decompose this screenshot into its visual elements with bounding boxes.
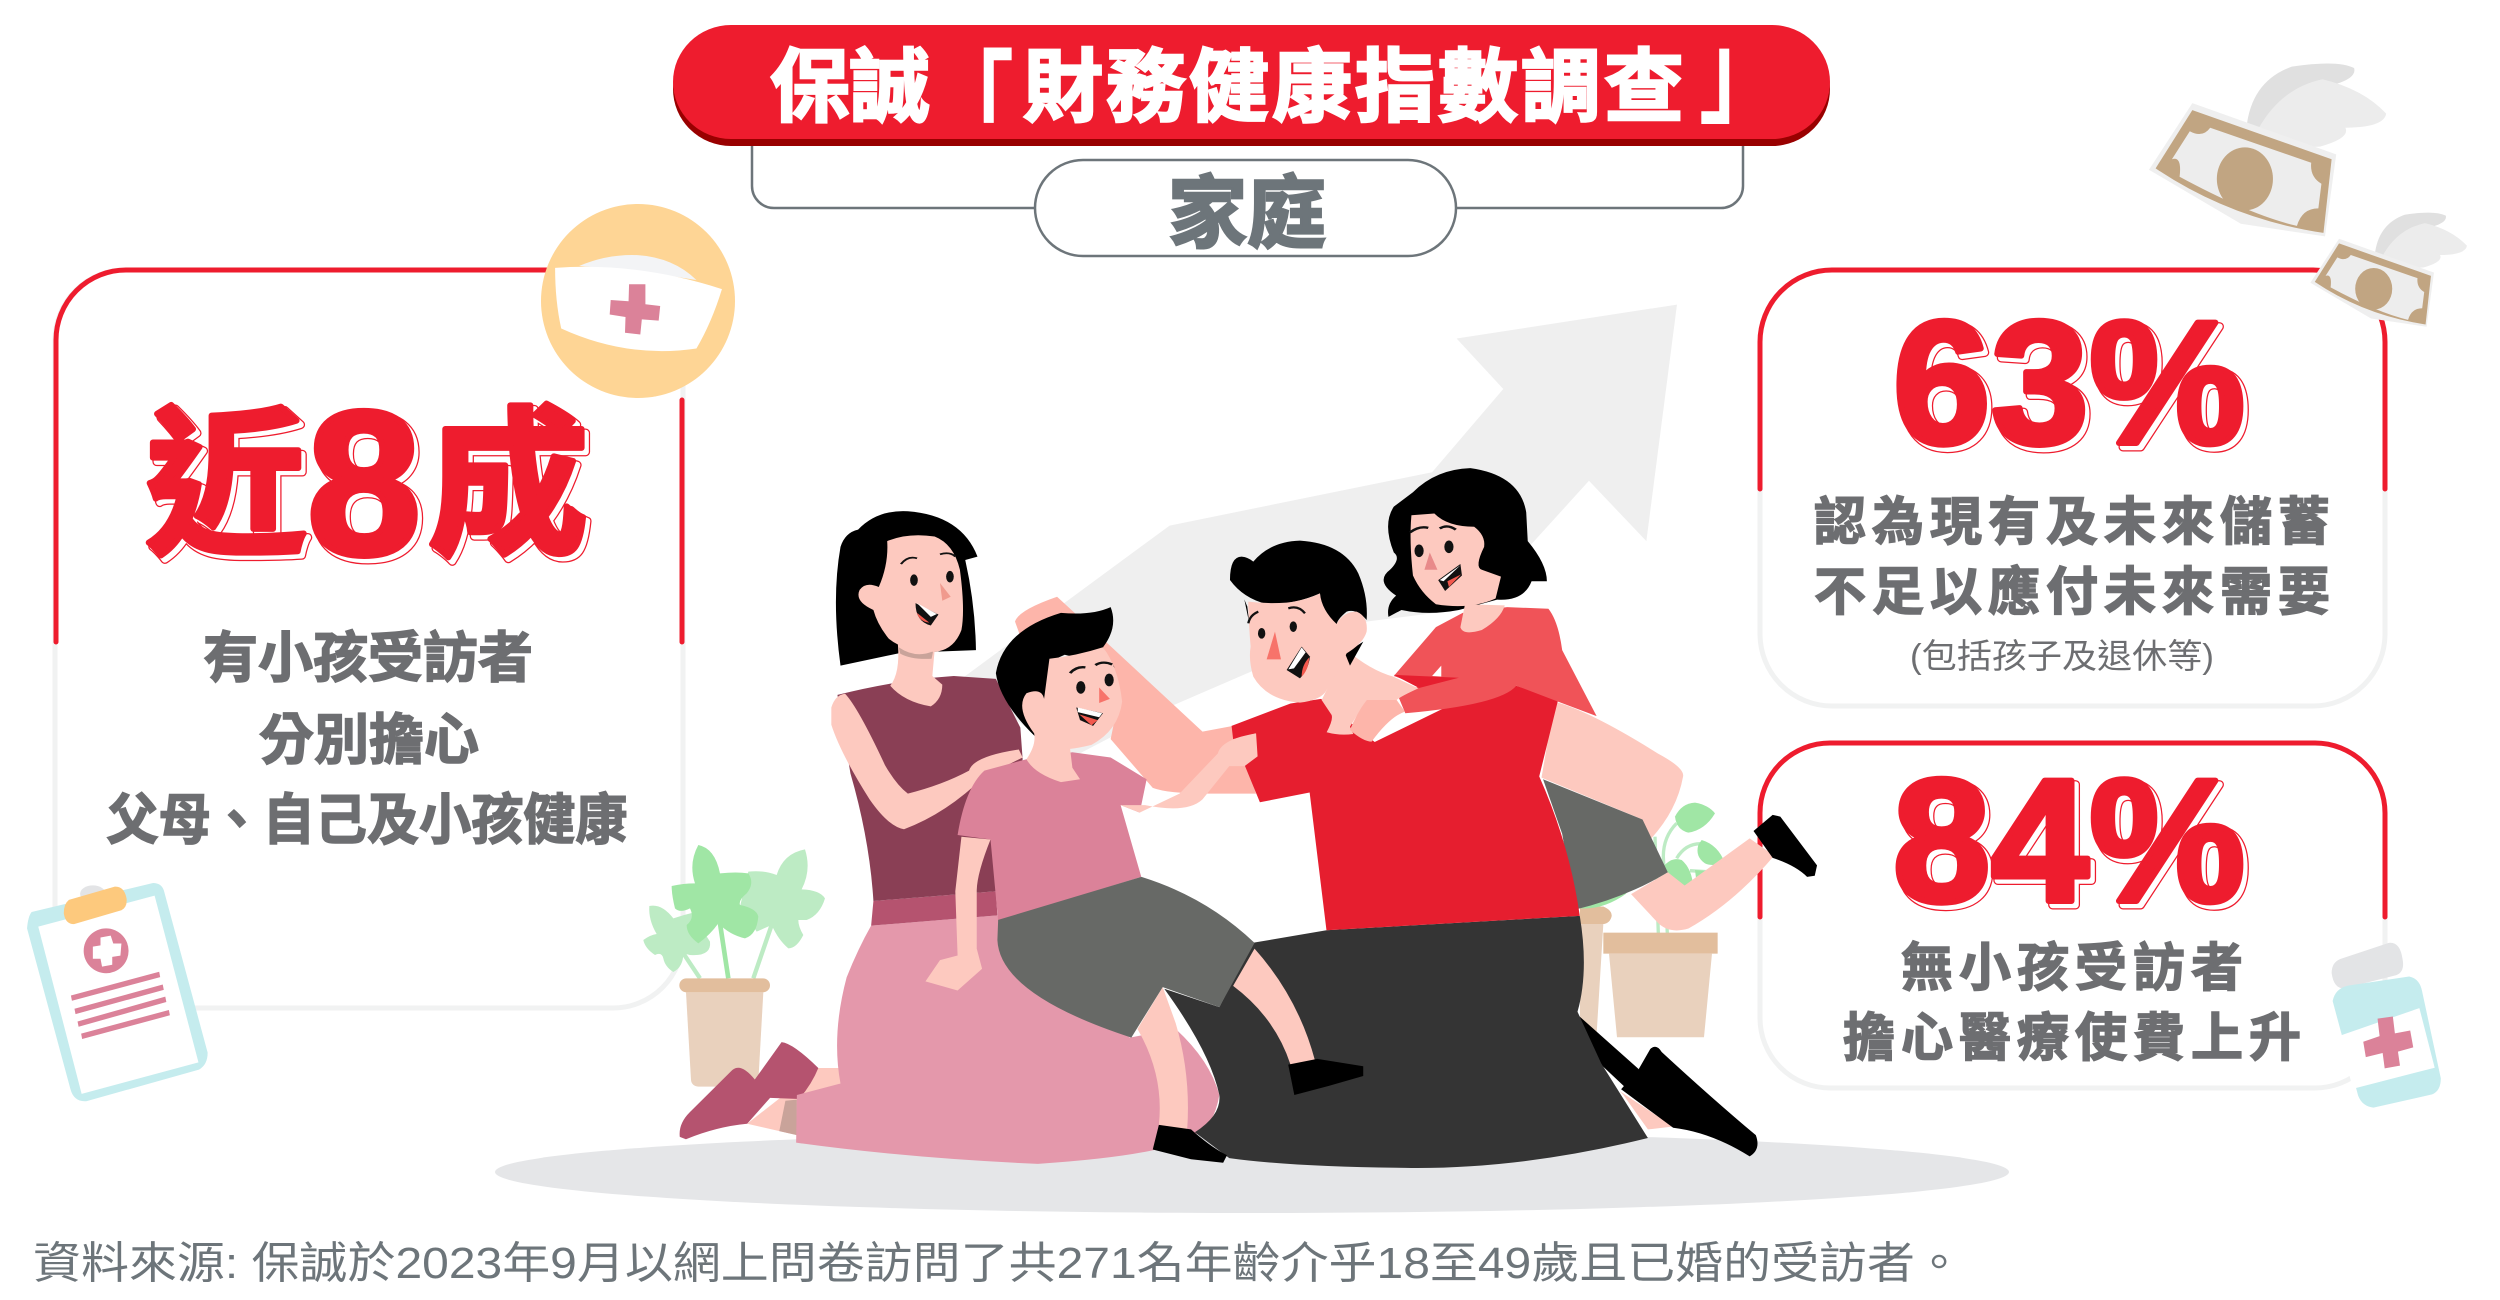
figure: mother lower body xyxy=(680,676,1219,1164)
right bottom stat 84%: 84% xyxy=(1897,748,2249,943)
left big stat: 成 xyxy=(432,400,592,579)
left big stat: 近 xyxy=(146,396,306,575)
figure: boy xyxy=(925,607,1363,1163)
panel: left card xyxy=(55,270,683,1008)
icon: flying money xyxy=(2149,63,2467,327)
illustration: family xyxy=(680,468,1817,1168)
right bottom description: 無小孩受訪者 xyxy=(1901,940,2249,998)
title banner: 「 xyxy=(930,41,1014,173)
figure: girl upper body xyxy=(1384,468,1597,716)
header connector bracket xyxy=(752,140,1743,208)
left big stat: 近 xyxy=(150,400,310,579)
left big stat: 近 xyxy=(150,400,310,579)
right top stat 63%: 63% xyxy=(1897,290,2249,485)
left big stat: 成 xyxy=(432,400,592,579)
large bill xyxy=(2149,63,2386,236)
left big stat: 8 xyxy=(311,373,425,602)
ground shadow xyxy=(495,1131,2009,1213)
right bottom stat 84%: 84% xyxy=(1893,744,2245,939)
plant: left xyxy=(643,845,825,1087)
subtitle pill xyxy=(1035,160,1456,258)
icon: medical clipboard xyxy=(27,883,208,1101)
right top note: (包括孩子及退休等) xyxy=(1910,638,2214,676)
small bill xyxy=(2310,213,2467,327)
plant: right pots xyxy=(1580,803,1725,1037)
panel: right top card xyxy=(1760,270,2385,706)
figure: father head xyxy=(1230,541,1418,742)
figure: father feet xyxy=(1560,1015,1758,1156)
figure: mother head and arm xyxy=(831,511,1023,829)
subtitle pill: 家庭 xyxy=(1168,169,1326,258)
left big stat: 成 xyxy=(428,396,588,575)
right top description: 認為現有及未來儲蓄 xyxy=(1814,494,2336,552)
panel: right bottom card xyxy=(1760,743,2385,1088)
right bottom description: 擔心醫療使費上升 xyxy=(1843,1010,2307,1068)
icon: medicine bottle xyxy=(2332,943,2441,1108)
title banner: 財務健康指數調查 xyxy=(1023,43,1687,132)
figure: girl legs xyxy=(1542,702,1817,930)
left description text: 有小孩受訪者 xyxy=(203,627,533,689)
right bottom stat 84%: 84% xyxy=(1897,748,2249,943)
figure: father body xyxy=(1164,686,1648,1168)
left description text: 父母、自己及小孩健康 xyxy=(106,789,628,851)
title banner: 保誠 xyxy=(770,43,930,132)
right bottom description xyxy=(1843,940,2307,1068)
right top description xyxy=(1814,494,2336,622)
source footnote: 資料來源: 保誠於2023年9月以網上問卷訪問了共271名年齡介乎18至49歲且已婚的受訪者。 xyxy=(33,1239,1963,1288)
left big stat: 8 xyxy=(311,373,425,602)
left big stat xyxy=(146,369,592,602)
figure: father back arm xyxy=(1015,597,1256,794)
title banner xyxy=(673,6,1830,173)
right top description: 不足以應付未來需要 xyxy=(1814,564,2336,622)
left big stat: 8 xyxy=(307,369,421,598)
background rising arrow xyxy=(961,305,1677,759)
right top stat 63%: 63% xyxy=(1897,290,2249,485)
title banner: 」 xyxy=(1699,6,1783,138)
icon: nurse cap xyxy=(541,204,735,398)
right top stat 63%: 63% xyxy=(1893,286,2245,481)
left description text: 分別擔心 xyxy=(259,709,479,771)
left description text xyxy=(106,627,628,851)
